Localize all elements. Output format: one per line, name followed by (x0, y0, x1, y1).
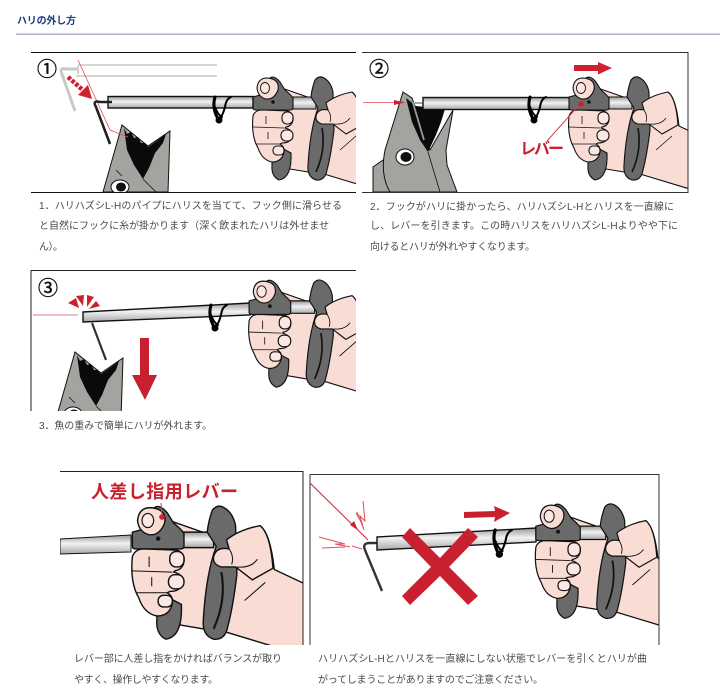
step 2 caption (370, 200, 678, 253)
illustration content step 1 (60, 60, 356, 192)
pull arrow tip (394, 100, 405, 105)
arrow head (78, 85, 92, 99)
hook falling (92, 323, 106, 360)
hand and grip (131, 505, 302, 645)
step 2 caption: し、レバーを引きます。この時ハリスをハリハズシL-Hよりやや下に (370, 219, 678, 232)
strap (529, 97, 546, 124)
hand and grip (568, 76, 688, 189)
illustration content step 3 (58, 279, 356, 411)
impact burst (68, 295, 100, 309)
left sparks (319, 537, 362, 549)
step 2 caption: 2．フックがハリに掛かったら、ハリハズシL-Hとハリスを一直線に (370, 200, 674, 213)
lever label: レバー (520, 141, 564, 158)
step 1 caption: 1．ハリハズシL-Hのパイプにハリスを当てて、フック側に滑らせる (39, 199, 342, 212)
slanted line (310, 483, 368, 540)
tube (423, 98, 570, 110)
right arrow (464, 506, 510, 522)
tube (60, 535, 131, 554)
step 2 caption: 向けるとハリが外れやすくなります。 (370, 240, 535, 253)
frame lines (310, 474, 659, 645)
strap (214, 97, 231, 124)
step 1 caption (39, 199, 342, 253)
step 3 caption: 3．魚の重みで簡単にハリが外れます。 (39, 419, 212, 432)
page heading: ハリの外し方 (17, 14, 76, 27)
dashed arrow (68, 77, 85, 92)
heading rule (16, 34, 720, 35)
panel: step 2 illustration (362, 52, 688, 193)
index finger caption (74, 652, 282, 686)
down arrow (132, 338, 157, 400)
illustration content step 2 (363, 76, 688, 192)
taut line (33, 314, 78, 316)
lever dot (578, 101, 584, 107)
tube (83, 303, 250, 322)
hook in mouth (413, 103, 424, 140)
index finger caption: やすく、操作しやすくなります。 (74, 673, 218, 686)
fish step 2 (373, 92, 457, 192)
fish step 1 (103, 125, 170, 194)
ghost hook (61, 69, 78, 111)
hand and grip (534, 503, 658, 626)
panel: step 3 illustration (30, 270, 356, 411)
hand and grip (248, 279, 356, 392)
frame lines (60, 472, 303, 645)
illustration content (60, 505, 302, 645)
frame lines (31, 52, 356, 192)
hand and grip (252, 76, 356, 184)
illustration content (363, 503, 658, 626)
ghost tube (76, 65, 217, 76)
lever callout line (161, 503, 162, 516)
leader line (78, 60, 128, 137)
index finger caption: レバー部に人差し指をかければバランスが取り (74, 652, 282, 665)
lever callout line (547, 104, 580, 141)
hook (364, 543, 382, 591)
frame lines (31, 270, 356, 411)
panel: incorrect use (310, 474, 660, 645)
lever label: 人差し指用レバー (91, 481, 238, 502)
line arrow head (350, 521, 358, 530)
strap (494, 530, 512, 558)
upper sparks (356, 501, 365, 530)
incorrect use caption: ハリハズシL-Hとハリスを一直線にしない状態でレバーを引くとハリが曲 (318, 652, 647, 665)
fish step 3 (58, 351, 124, 411)
number 1: ① (37, 58, 57, 81)
number 2: ② (369, 58, 389, 81)
incorrect use caption: がってしまうことがありますのでご注意ください。 (318, 673, 543, 686)
lever dot (159, 514, 165, 520)
panel: index finger lever (60, 471, 304, 645)
hook (95, 102, 112, 144)
step 1 caption: ん）。 (39, 241, 63, 253)
line pull (363, 102, 394, 103)
right arrow (574, 62, 612, 74)
tube (377, 528, 536, 550)
strap (210, 305, 227, 332)
number 3: ③ (38, 277, 58, 300)
tube (108, 96, 253, 108)
frame lines (362, 52, 688, 192)
panel: step 1 illustration (31, 52, 356, 193)
incorrect use caption (318, 652, 647, 686)
red cross (402, 528, 478, 605)
step 1 caption: と自然にフックに糸が掛かります（深く飲まれたハリは外せませ (39, 219, 329, 232)
